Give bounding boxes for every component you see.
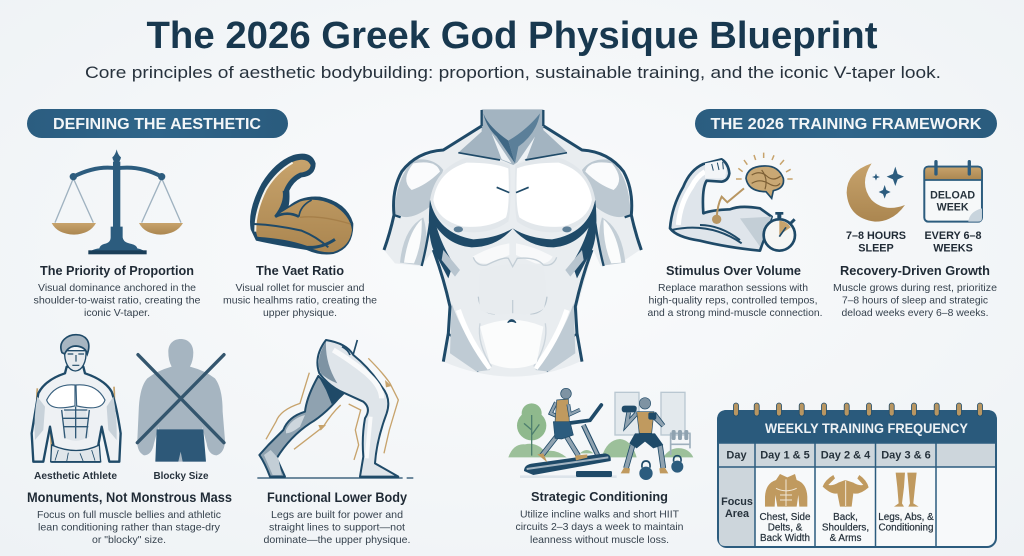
heading: The Vaet Ratio	[256, 263, 344, 278]
icon: deload calendar	[924, 162, 982, 222]
icon: deload calendar: WEEK	[937, 202, 969, 214]
text block	[516, 510, 684, 546]
calendar title: WEEKLY TRAINING FREQUENCY	[765, 420, 969, 436]
text block	[223, 283, 377, 319]
text block: or "blocky" size.	[92, 535, 166, 546]
text block	[648, 283, 822, 319]
text block: high-quality reps, controlled tempos,	[648, 296, 818, 306]
icon: balance scale	[52, 149, 183, 254]
text block: circuits 2–3 days a week to maintain	[516, 522, 684, 533]
text block: Muscle grows during rest, prioritize	[833, 283, 997, 294]
day row: Day 1 & 5	[760, 450, 810, 462]
text block: Utilize incline walks and short HIIT	[520, 510, 680, 520]
heading: training framework	[695, 109, 997, 138]
text block: deload weeks every 6–8 weeks.	[842, 308, 988, 319]
calendar frame	[717, 410, 997, 547]
focus text: chest	[759, 512, 811, 544]
heading: Strategic Conditioning	[531, 489, 668, 504]
icon: legs	[894, 473, 919, 507]
text block: Visual rollet for muscier and	[236, 283, 365, 294]
row label: focus area: Focus	[721, 496, 753, 508]
label: deload frequency: WEEKS	[933, 242, 973, 254]
label: deload frequency	[924, 230, 982, 254]
text block: Visual dominance anchored in the	[38, 283, 196, 294]
text block: straight lines to support—not	[269, 522, 405, 534]
heading: Monuments, Not Monstrous Mass	[27, 489, 232, 505]
text block: Replace marathon sessions with	[658, 283, 808, 294]
day row: Day 3 & 6	[881, 450, 931, 462]
text block: upper physique.	[263, 308, 337, 319]
text block: Focus on full muscle bellies and athletic	[37, 510, 221, 521]
focus text: back	[822, 512, 869, 544]
label: sleep: 7–8 HOURS	[846, 230, 906, 242]
icon: flexed arm, brain and stopwatch	[670, 153, 795, 251]
icon: chest torso	[765, 474, 807, 507]
text block: 7–8 hours of sleep and strategic	[842, 296, 988, 306]
panel: the vaet ratio	[223, 154, 377, 319]
focus text: back: & Arms	[830, 533, 861, 544]
text block: music healhms ratio, creating the	[223, 296, 377, 306]
icon: flexed arm	[250, 154, 353, 254]
heading: The Priority of Proportion	[40, 263, 194, 278]
day row: Day	[726, 450, 747, 462]
text block: iconic V-taper.	[84, 308, 150, 319]
label: sleep	[846, 230, 906, 254]
text block	[37, 510, 221, 546]
label: Aesthetic Athlete	[34, 470, 117, 482]
text block	[34, 283, 201, 319]
focus text: legs	[878, 512, 934, 534]
text block: dominate—the upper physique.	[264, 535, 410, 546]
panel: recovery-driven growth	[833, 162, 997, 319]
focus text: legs: Legs, Abs, &	[878, 512, 934, 523]
focus text: legs: Conditioning	[879, 522, 933, 534]
focus text: chest: Chest, Side	[759, 512, 811, 523]
row label: focus area: Area	[725, 508, 750, 520]
icon: crescent moon with stars	[847, 163, 905, 222]
title: The 2026 Greek God Physique Blueprint	[146, 15, 878, 57]
label: Blocky Size	[154, 470, 209, 482]
heading: Stimulus Over Volume	[666, 263, 801, 278]
icon: legs in lunge	[257, 340, 413, 478]
panel: monuments	[27, 335, 232, 546]
focus text: chest: Back Width	[760, 533, 810, 544]
panel: weekly training frequency calendar	[717, 403, 997, 547]
subtitle: Core principles of aesthetic bodybuilding: proportion, sustainable training, and the iconic V-taper look.	[85, 63, 941, 82]
text block: lean conditioning rather than stage-dry	[38, 522, 221, 534]
icon: blocky physique crossed out	[137, 339, 225, 462]
icon: deload calendar: DELOAD	[930, 190, 975, 202]
icon: back and arms	[823, 475, 869, 507]
focus text: back: Back,	[833, 512, 858, 523]
panel: functional lower body	[257, 340, 413, 546]
heading: defining the aesthetic	[27, 109, 288, 138]
row label: focus area	[721, 496, 753, 520]
panel: priority of proportion	[34, 149, 201, 319]
panel: strategic conditioning	[508, 388, 693, 546]
focus text: back: Shoulders,	[822, 522, 869, 534]
day row: Day 2 & 4	[821, 450, 871, 462]
text block: shoulder-to-waist ratio, creating the	[34, 296, 201, 306]
text block	[833, 283, 997, 319]
calendar binding rings	[734, 403, 982, 416]
heading: defining the aesthetic: DEFINING THE AESTHETIC	[53, 116, 261, 133]
text block: leanness without muscle loss.	[530, 535, 669, 546]
focus text: chest: Delts, &	[768, 522, 803, 534]
icon: aesthetic athlete	[32, 335, 121, 462]
central torso illustration	[384, 109, 641, 377]
heading: training framework: THE 2026 TRAINING FRAMEWORK	[710, 116, 982, 133]
heading: Functional Lower Body	[267, 489, 407, 505]
heading: Recovery-Driven Growth	[840, 263, 990, 278]
text block	[264, 510, 410, 546]
icon: treadmill and kettlebell gym scene	[508, 388, 693, 480]
label: deload frequency: EVERY 6–8	[924, 230, 982, 242]
label: sleep: SLEEP	[858, 242, 894, 254]
text block: Legs are built for power and	[271, 510, 403, 521]
panel: stimulus over volume	[648, 153, 822, 319]
text block: and a strong mind-muscle connection.	[648, 308, 822, 319]
day row	[726, 450, 931, 462]
